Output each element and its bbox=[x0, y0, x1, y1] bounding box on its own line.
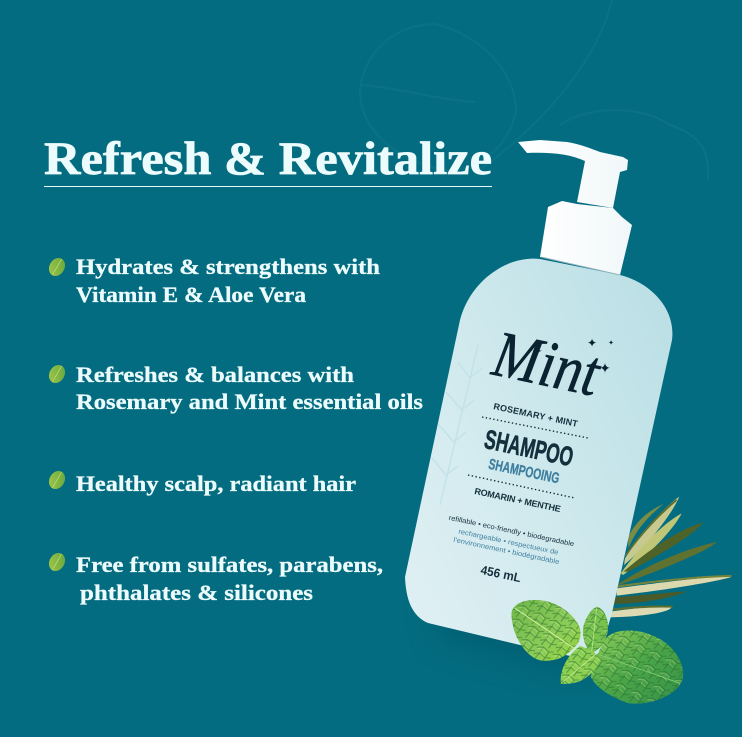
benefit: scalp: Healthy scalp, radiant hair bbox=[76, 471, 356, 496]
label text: ROMARIN + MENTHE bbox=[474, 486, 562, 514]
label text: ROSEMARY + MINT bbox=[493, 401, 579, 429]
title: Refresh & Revitalize bbox=[44, 133, 492, 185]
benefit: free from: phthalates & silicones bbox=[80, 580, 313, 605]
label text: refillable • eco-friendly • biodegradable bbox=[448, 515, 575, 548]
bottle bbox=[405, 140, 672, 659]
brand name Mint with stars: Mint bbox=[486, 317, 607, 411]
brand name Mint with stars: ✦ bbox=[608, 339, 614, 347]
dotted lines bbox=[468, 417, 588, 498]
label text: SHAMPOOING bbox=[487, 456, 561, 487]
label text bbox=[448, 401, 579, 585]
benefit: refreshes: Rosemary and Mint essential oils bbox=[76, 389, 423, 414]
bottle body bbox=[405, 259, 672, 659]
right leaf bbox=[591, 631, 683, 704]
label text: SHAMPOO bbox=[482, 424, 576, 472]
brand name Mint with stars: ✦ bbox=[587, 336, 597, 350]
icon: leaf bullet bbox=[46, 468, 68, 492]
benefit: refreshes bbox=[46, 362, 423, 414]
top small leaf bbox=[583, 607, 608, 653]
benefit: free from bbox=[46, 550, 383, 605]
icon: leaf bullet bbox=[46, 362, 68, 386]
benefit: free from: Free from sulfates, parabens, bbox=[76, 552, 383, 577]
faint background leaf outlines bbox=[360, 0, 708, 180]
benefit: hydrates: Hydrates & strengthens with bbox=[76, 254, 380, 279]
pump collar bbox=[540, 201, 632, 275]
brand name Mint with stars: ✦ bbox=[531, 344, 543, 360]
benefit: hydrates: Vitamin E & Aloe Vera bbox=[76, 282, 306, 307]
label text: rechargeable • respectueux de bbox=[458, 529, 559, 557]
icon: leaf bullet bbox=[46, 255, 68, 279]
benefit: hydrates bbox=[46, 254, 380, 307]
rosemary sprig bbox=[610, 497, 731, 617]
left leaf bbox=[511, 600, 581, 661]
mint leaves bbox=[511, 600, 683, 704]
benefit: refreshes: Refreshes & balances with bbox=[76, 362, 354, 387]
bottle shadow bbox=[430, 600, 610, 680]
pump head and stem bbox=[518, 140, 628, 208]
label text: 456 mL bbox=[479, 563, 523, 585]
brand name Mint with stars: ✦ bbox=[599, 361, 611, 377]
label text: l'environnement • biodégradable bbox=[453, 537, 560, 566]
faint rosemary on label bbox=[432, 345, 482, 505]
icon: leaf bullet bbox=[46, 550, 68, 574]
bottom small leaf bbox=[561, 646, 601, 684]
